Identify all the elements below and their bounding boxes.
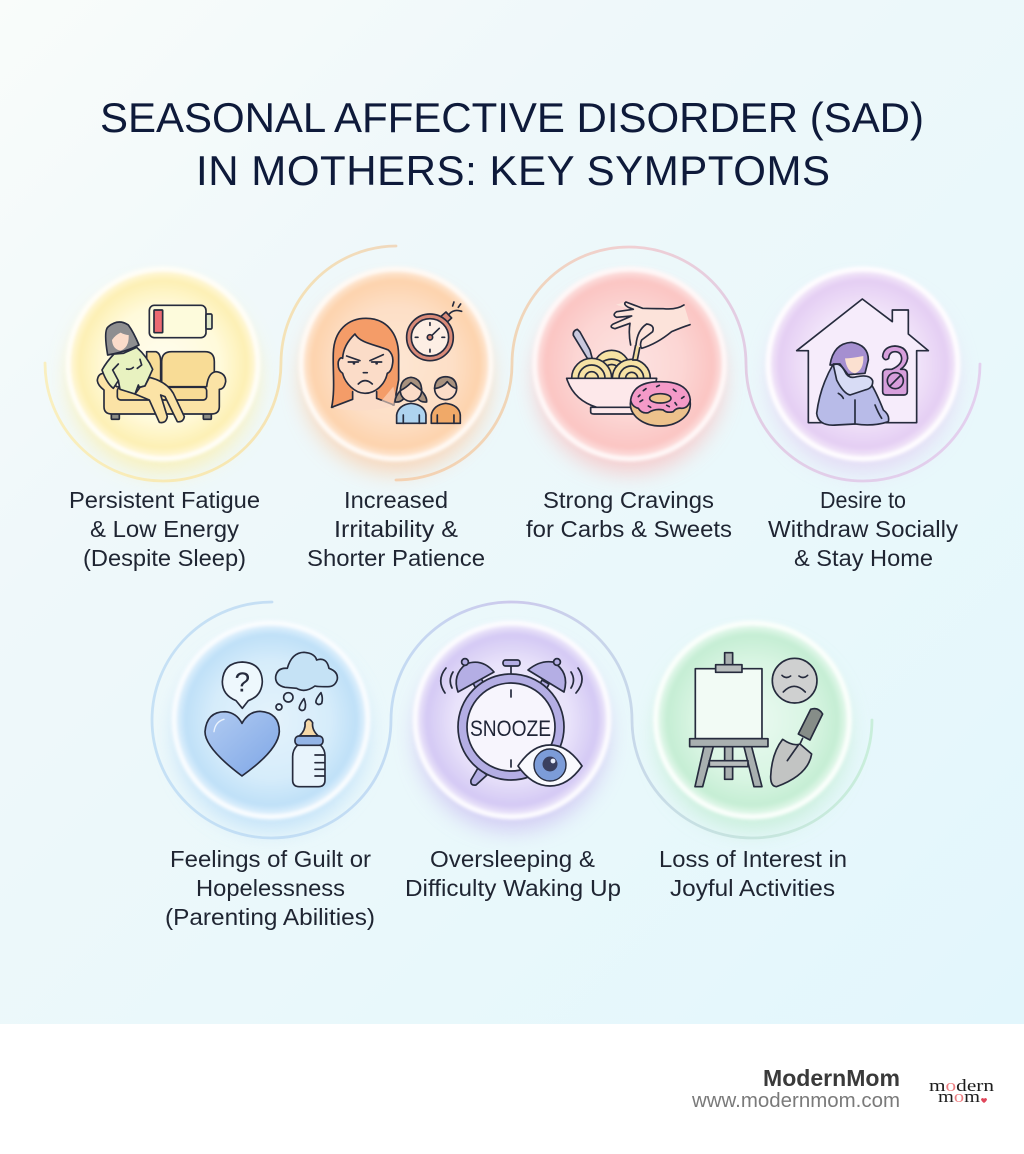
footer brand text bbox=[691, 1065, 900, 1112]
label: Hopelessness bbox=[196, 875, 345, 901]
label: Strong Cravings bbox=[543, 487, 714, 513]
panel: guilt or hopelessness bbox=[165, 623, 375, 930]
label: for Carbs & Sweets bbox=[526, 516, 732, 542]
icon: angry mother, timer and children bbox=[332, 302, 462, 423]
label: Persistent Fatigue bbox=[69, 487, 260, 513]
label: (Despite Sleep) bbox=[83, 545, 246, 571]
label: Loss of Interest in bbox=[659, 846, 847, 872]
label bbox=[659, 846, 847, 901]
label bbox=[768, 487, 959, 571]
icon: noodles bowl, hand and donut bbox=[567, 302, 690, 426]
connector arc: bottom row bbox=[152, 602, 872, 838]
footer brand text: ModernMom bbox=[763, 1065, 900, 1091]
label bbox=[307, 487, 485, 571]
footer brand text: www.modernmom.com bbox=[691, 1090, 900, 1112]
panel: persistent fatigue bbox=[68, 269, 260, 571]
label: & Low Energy bbox=[90, 516, 240, 542]
label: Difficulty Waking Up bbox=[405, 875, 621, 901]
panel: oversleeping bbox=[405, 623, 621, 901]
title: IN MOTHERS: KEY SYMPTOMS bbox=[196, 147, 830, 194]
title: SEASONAL AFFECTIVE DISORDER (SAD) bbox=[100, 94, 924, 141]
label: Oversleeping & bbox=[430, 846, 595, 872]
panel: strong cravings bbox=[526, 269, 732, 542]
icon: snooze alarm clock and eye bbox=[441, 659, 582, 786]
title bbox=[100, 94, 924, 194]
label: Feelings of Guilt or bbox=[170, 846, 371, 872]
label: Withdraw Socially bbox=[768, 516, 959, 542]
logo: modern bbox=[929, 1076, 995, 1095]
icon: woman huddled in a house bbox=[797, 299, 928, 425]
icon: easel, sad face and trowel bbox=[690, 653, 823, 787]
icon: question, cloud, heart and bottle: ? bbox=[235, 667, 250, 698]
label bbox=[69, 487, 260, 571]
panel: increased irritability bbox=[301, 269, 491, 571]
label bbox=[165, 846, 375, 930]
logo: mom bbox=[938, 1087, 980, 1106]
label: Desire to bbox=[820, 487, 906, 513]
connector arc: top right bbox=[396, 247, 980, 481]
label: Joyful Activities bbox=[670, 875, 835, 901]
logo bbox=[929, 1076, 995, 1106]
icon: snooze alarm clock and eye: SNOOZE bbox=[470, 716, 551, 741]
label bbox=[526, 487, 732, 542]
icon: question, cloud, heart and bottle bbox=[205, 652, 337, 787]
panel: desire to withdraw bbox=[768, 269, 959, 571]
icon: woman on sofa with low battery bbox=[97, 305, 226, 423]
label: Irritability & bbox=[334, 516, 458, 542]
label: Shorter Patience bbox=[307, 545, 485, 571]
panel: loss of interest bbox=[656, 623, 850, 901]
connector arc: top left bbox=[45, 246, 396, 481]
label: (Parenting Abilities) bbox=[165, 904, 375, 930]
label bbox=[405, 846, 621, 901]
label: & Stay Home bbox=[794, 545, 933, 571]
label: Increased bbox=[344, 487, 448, 513]
footer band bbox=[0, 1024, 1024, 1154]
